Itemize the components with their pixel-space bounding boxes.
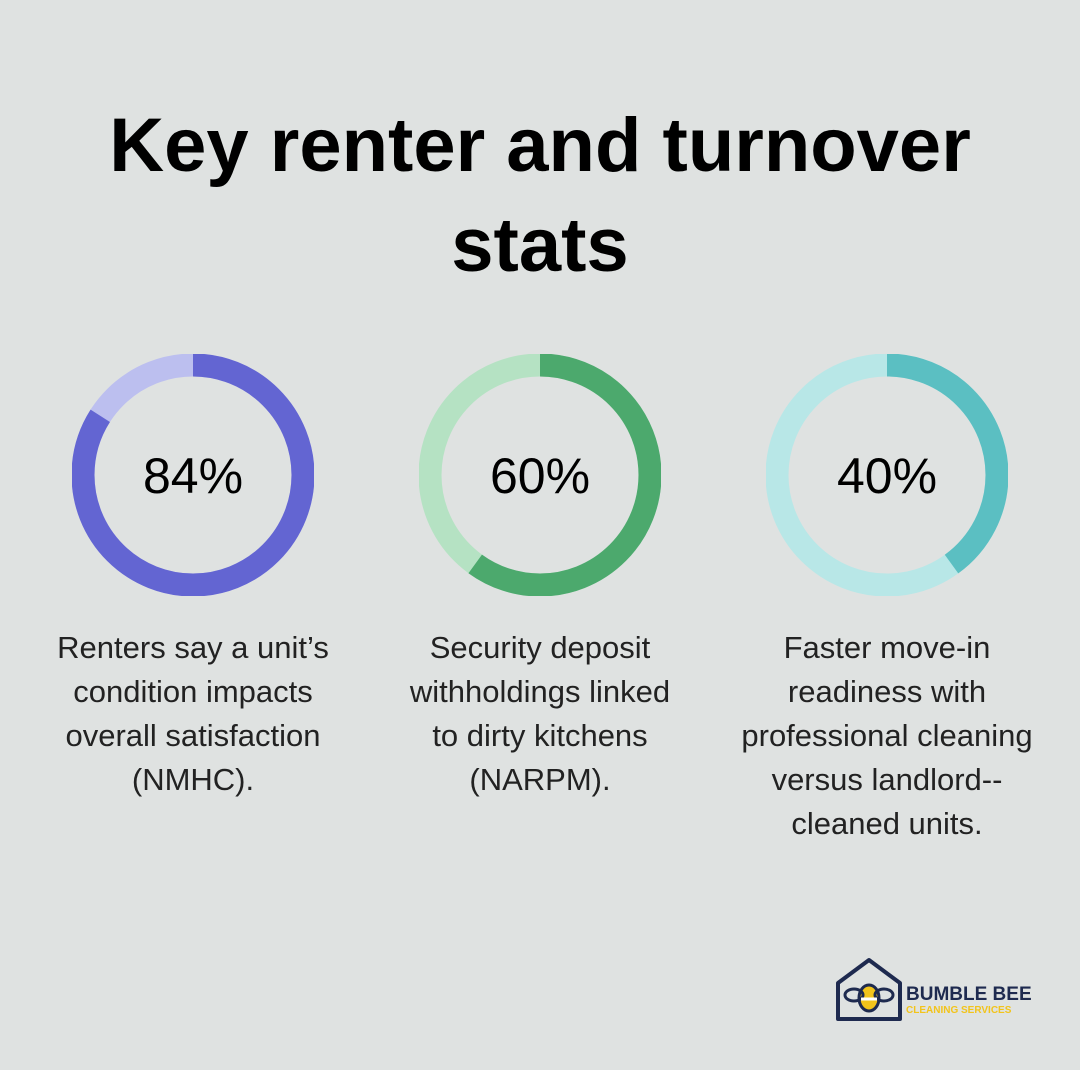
title: stats [451, 203, 629, 288]
text: 60% description: Security deposit [430, 630, 650, 665]
ring: 60%: 60% [490, 448, 590, 504]
text: 84% description [57, 630, 329, 797]
text: 40% description [741, 630, 1033, 841]
icon: bee house [836, 958, 902, 1021]
logo [836, 958, 1032, 1021]
text: 84% description: (NMHC). [132, 762, 254, 797]
logo text [906, 984, 1032, 1016]
title: Key renter and turnover [109, 103, 971, 188]
ring: 84% [72, 354, 314, 596]
ring: 60% [419, 354, 661, 596]
text: 40% description: cleaned units. [791, 806, 983, 841]
text: 60% description: withholdings linked [410, 674, 670, 709]
logo text: CLEANING SERVICES [906, 1005, 1011, 1016]
text: 60% description: (NARPM). [469, 762, 611, 797]
text: 60% description [410, 630, 670, 797]
text: 40% description: Faster move-in [784, 630, 990, 665]
logo text: BUMBLE BEE [906, 984, 1032, 1005]
text: 40% description: readiness with [788, 674, 986, 709]
text: 84% description: overall satisfaction [65, 718, 320, 753]
ring: 84%: 84% [143, 448, 243, 504]
ring: 40% [766, 354, 1008, 596]
text: 84% description: Renters say a unit’s [57, 630, 329, 665]
title [109, 103, 971, 288]
text: 84% description: condition impacts [73, 674, 313, 709]
text: 60% description: to dirty kitchens [432, 718, 648, 753]
text: 40% description: versus landlord-- [772, 762, 1002, 797]
text: 40% description: professional cleaning [741, 718, 1033, 753]
ring: 40%: 40% [837, 448, 937, 504]
